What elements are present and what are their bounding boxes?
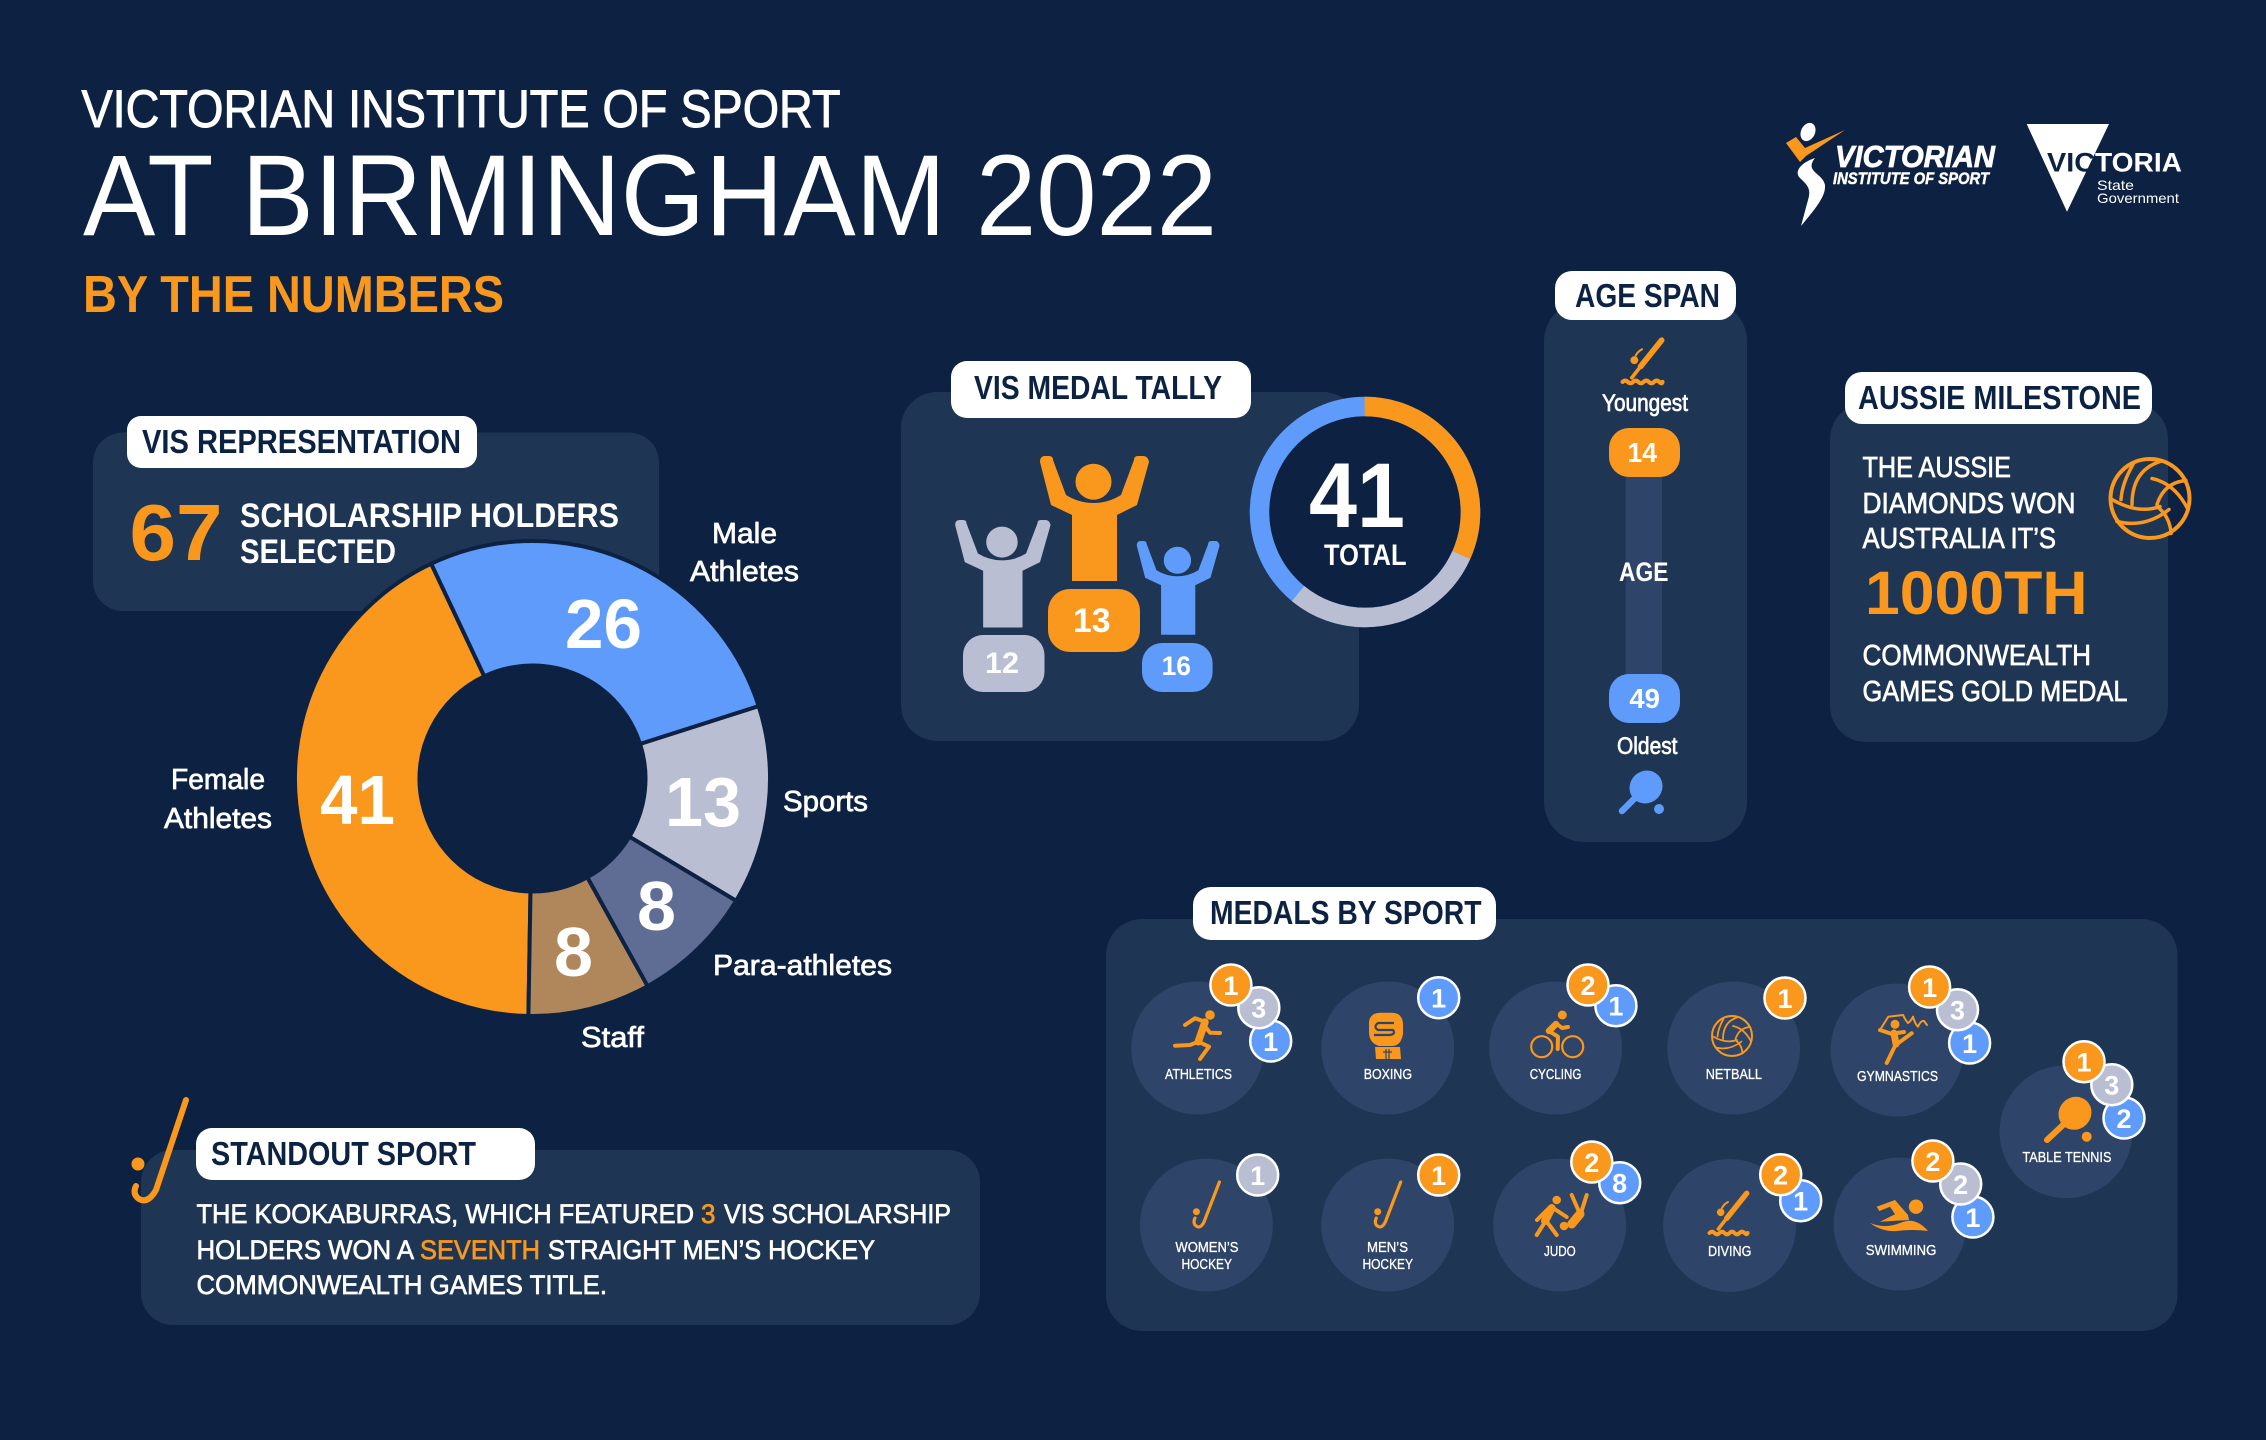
panel: standout sport	[132, 1100, 980, 1325]
milestone text: DIAMONDS WON	[1862, 488, 2076, 520]
milestone text: GAMES GOLD MEDAL	[1862, 676, 2128, 708]
sport: cycling: CYCLING	[1530, 1067, 1581, 1083]
panel: age span	[1544, 271, 1747, 842]
panel: medals by sport	[1106, 887, 2178, 1331]
stat: 67 scholarship holders: 67	[130, 488, 222, 577]
sport: athletics: 3	[1251, 994, 1266, 1024]
milestone text: THE AUSSIE	[1862, 452, 2011, 484]
logo: Victorian Institute of Sport	[1786, 120, 1996, 226]
panel: Aussie milestone	[1830, 372, 2190, 742]
heading: medals by sport: MEDALS BY SPORT	[1210, 894, 1482, 931]
sport: athletics: 1	[1263, 1027, 1278, 1057]
donut labels: Staff	[581, 1022, 645, 1054]
donut chart: representation breakdown: 8	[554, 913, 593, 991]
donut labels: Male	[712, 518, 777, 550]
sport: athletics	[1131, 964, 1291, 1114]
heading: VIS representation	[127, 416, 477, 468]
logo: Victoria State Government: TORIA	[2095, 148, 2182, 178]
stat: 67 scholarship holders	[130, 488, 619, 577]
age scale: 14	[1628, 437, 1657, 468]
sport: table tennis: TABLE TENNIS	[2022, 1150, 2111, 1166]
donut labels: Athletes	[164, 803, 272, 835]
heading: standout sport: STANDOUT SPORT	[211, 1135, 476, 1172]
heading: VIS medal tally	[951, 361, 1251, 418]
heading: age span: AGE SPAN	[1575, 277, 1720, 314]
title block: AT BIRMINGHAM 2022	[83, 132, 1217, 260]
sport: judo: 2	[1584, 1148, 1599, 1178]
ring chart: 41 total medals: 41	[1309, 445, 1405, 547]
sport: swimming	[1834, 1140, 1993, 1290]
sport: cycling	[1489, 964, 1636, 1114]
age scale	[1602, 390, 1688, 760]
title block	[82, 80, 1217, 324]
heading: VIS representation: VIS REPRESENTATION	[142, 423, 461, 460]
figure: gold podium: 13	[1073, 602, 1111, 640]
donut labels: Para-athletes	[713, 950, 892, 982]
standout text	[196, 1199, 951, 1300]
stat: 67 scholarship holders: SELECTED	[240, 533, 396, 571]
logo: Victoria State Government: VIC	[2047, 148, 2095, 178]
sport: table tennis	[2000, 1041, 2144, 1198]
standout text: SEVENTH	[420, 1235, 540, 1265]
sport: women's hockey: 1	[1250, 1161, 1265, 1191]
donut chart: representation breakdown: 26	[565, 585, 642, 663]
icon: netball	[2110, 459, 2190, 538]
logo: Victoria State Government: State	[2097, 177, 2134, 193]
donut chart: representation breakdown: 8	[637, 867, 676, 945]
sport: cycling: 2	[1580, 971, 1596, 1001]
age scale: AGE	[1619, 557, 1668, 587]
sport: women's hockey: WOMEN’S	[1175, 1240, 1238, 1256]
ring chart: 41 total medals	[1260, 406, 1470, 618]
heading: Aussie milestone	[1845, 372, 2152, 424]
panel: VIS representation	[93, 416, 659, 611]
donut chart: representation breakdown: 41	[320, 761, 395, 839]
sport: gymnastics: GYMNASTICS	[1857, 1069, 1938, 1085]
ring chart: 41 total medals: TOTAL	[1324, 539, 1406, 572]
sport: men's hockey	[1321, 1154, 1459, 1292]
milestone text: COMMONWEALTH	[1862, 640, 2091, 672]
heading: standout sport	[196, 1128, 535, 1180]
heading: VIS medal tally: VIS MEDAL TALLY	[974, 369, 1222, 406]
sport: men's hockey: MEN’S	[1367, 1240, 1408, 1256]
figure: silver podium: 12	[985, 647, 1019, 680]
sport: cycling: 1	[1608, 992, 1623, 1022]
sport: athletics: 1	[1223, 971, 1238, 1001]
figure: bronze podium	[1137, 541, 1220, 692]
sport: boxing: 1	[1431, 984, 1446, 1014]
donut labels: Athletes	[690, 556, 799, 588]
icon: diver youngest	[1623, 340, 1662, 383]
sport: gymnastics: 3	[1950, 996, 1965, 1026]
logo: Victorian Institute of Sport: INSTITUTE OF SPORT	[1833, 169, 1990, 188]
sport: swimming: 2	[1953, 1170, 1968, 1200]
sport: table tennis: 1	[2076, 1048, 2092, 1078]
sport: judo: JUDO	[1544, 1244, 1576, 1260]
sport: men's hockey: 1	[1431, 1161, 1446, 1191]
logo: Victorian Institute of Sport: VICTORIAN	[1835, 139, 1996, 174]
panel: VIS medal tally	[901, 361, 1359, 741]
heading: Aussie milestone: AUSSIE MILESTONE	[1858, 379, 2141, 416]
figure: bronze podium: 16	[1162, 651, 1191, 681]
sport: swimming: 2	[1925, 1147, 1940, 1177]
sport: gymnastics: 1	[1922, 973, 1937, 1003]
donut labels: Female	[171, 764, 265, 796]
sport: table tennis: 3	[2104, 1071, 2119, 1101]
sport: gymnastics	[1830, 966, 1990, 1116]
age scale: 49	[1629, 683, 1660, 714]
sport: netball: 1	[1777, 984, 1793, 1014]
sport: diving: DIVING	[1708, 1244, 1751, 1260]
sport: judo: 8	[1612, 1169, 1627, 1199]
sport: athletics: ATHLETICS	[1165, 1067, 1232, 1083]
age scale: Youngest	[1602, 390, 1688, 417]
sport: swimming: 1	[1965, 1203, 1980, 1233]
logo: Victoria State Government	[2027, 124, 2182, 212]
standout text: 3	[701, 1199, 716, 1229]
donut chart: representation breakdown: 13	[665, 763, 741, 841]
donut chart: representation breakdown	[295, 541, 770, 1016]
sport: diving: 2	[1773, 1161, 1788, 1191]
sport: women's hockey: HOCKEY	[1182, 1257, 1232, 1273]
sport: boxing: BOXING	[1364, 1067, 1412, 1083]
donut labels: Sports	[783, 786, 868, 818]
age scale: Oldest	[1617, 733, 1678, 760]
icon: hockey stick	[132, 1100, 186, 1200]
sport: swimming: SWIMMING	[1866, 1243, 1936, 1259]
milestone text	[1862, 452, 2128, 708]
sport: gymnastics: 1	[1962, 1029, 1977, 1059]
stat: 67 scholarship holders: SCHOLARSHIP HOLDERS	[240, 497, 619, 535]
milestone text: 1000TH	[1865, 559, 2088, 627]
heading: medals by sport	[1193, 887, 1496, 940]
standout text: COMMONWEALTH GAMES TITLE.	[196, 1270, 607, 1300]
sport: diving	[1663, 1154, 1821, 1292]
title block: BY THE NUMBERS	[83, 266, 504, 324]
sport: table tennis: 2	[2116, 1104, 2132, 1134]
sport: men's hockey: HOCKEY	[1362, 1257, 1413, 1273]
sport: diving: 1	[1793, 1187, 1808, 1217]
donut labels	[164, 518, 892, 1054]
standout text: HOLDERS WON A	[196, 1235, 414, 1265]
sport: boxing	[1321, 977, 1459, 1114]
figure: silver podium	[955, 520, 1051, 692]
title block: VICTORIAN INSTITUTE OF SPORT	[82, 80, 840, 139]
logo: Victoria State Government: Government	[2097, 190, 2179, 206]
sport: women's hockey	[1140, 1154, 1278, 1292]
standout text: STRAIGHT MEN’S HOCKEY	[548, 1235, 875, 1265]
heading: age span	[1555, 271, 1736, 320]
sport: netball	[1667, 978, 1806, 1114]
milestone text: AUSTRALIA IT’S	[1862, 523, 2056, 555]
icon: paddle oldest	[1622, 764, 1669, 814]
figure: gold podium	[1040, 456, 1149, 652]
standout text: VIS SCHOLARSHIP	[724, 1199, 951, 1229]
sport: netball: NETBALL	[1706, 1067, 1762, 1083]
standout text: THE KOOKABURRAS, WHICH FEATURED	[196, 1199, 694, 1229]
sport: judo	[1493, 1142, 1640, 1292]
